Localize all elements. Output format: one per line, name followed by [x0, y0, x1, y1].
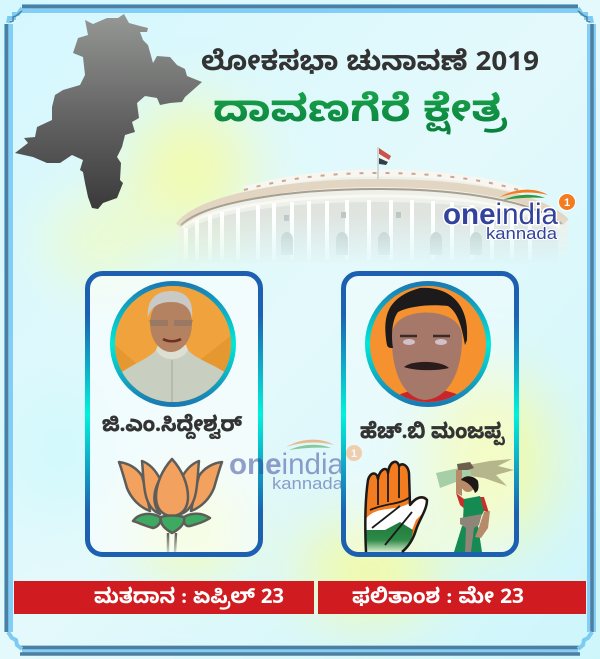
title: Lok Sabha election 2019: ಲೋಕಸಭಾ ಚುನಾವಣೆ 2019 — [201, 47, 539, 85]
panel: Congress / JDS candidate — [344, 274, 516, 554]
watermark logo — [229, 440, 362, 493]
watermark logo: 1 — [351, 448, 357, 460]
icon: Congress hand — [365, 462, 427, 552]
logo: oneindia kannada: kannada — [486, 224, 558, 243]
logo: oneindia kannada: 1 — [564, 197, 570, 209]
icon: JDS woman with paddy sheaf — [436, 459, 514, 552]
icon: BJP lotus — [119, 459, 222, 552]
date banner: result date: ಫಲಿತಾಂಶ : ಮೇ 23 — [352, 585, 524, 615]
portrait: G. M. Siddeshwar — [110, 284, 236, 405]
candidate name: ಜಿ.ಎಂ.ಸಿದ್ದೇಶ್ವರ್ — [102, 413, 243, 443]
candidate name: ಹೆಚ್.ಬಿ ಮಂಜಪ್ಪ — [360, 421, 505, 450]
logo: oneindia kannada — [443, 190, 576, 243]
map of Davanagere constituency — [15, 14, 202, 209]
flag — [378, 147, 391, 179]
watermark logo: kannada — [272, 474, 344, 493]
heading: Davanagere constituency: ದಾವಣಗೆರೆ ಕ್ಷೇತ್ರ — [213, 91, 508, 141]
date banner: result date — [318, 581, 586, 615]
parliament building — [178, 147, 568, 264]
portrait: H. B. Manjappa — [365, 284, 491, 405]
panel: BJP candidate — [88, 274, 260, 554]
date banner: polling date: ಮತದಾನ : ಏಪ್ರಿಲ್ 23 — [94, 586, 284, 615]
logo: oneindia kannada: oneindia — [443, 198, 558, 231]
date banner: polling date — [14, 581, 314, 615]
watermark logo: oneindia — [229, 448, 344, 481]
